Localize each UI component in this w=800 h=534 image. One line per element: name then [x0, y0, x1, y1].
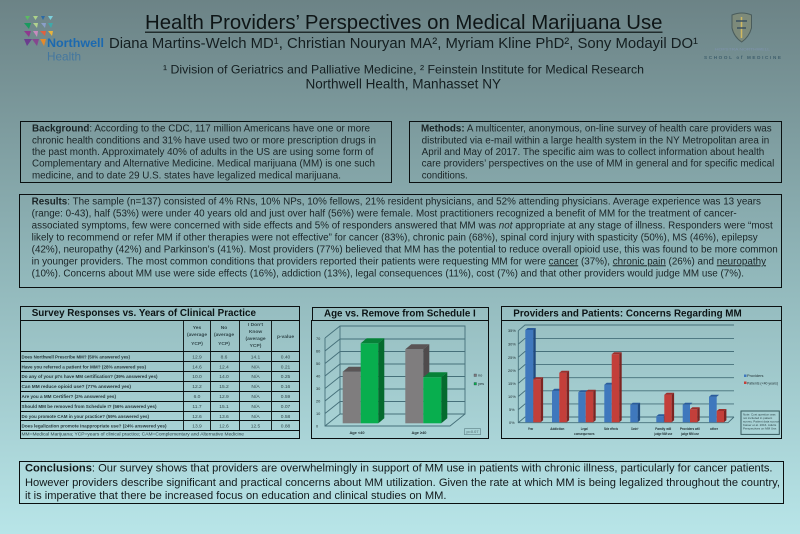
chart axis labels: 30%	[508, 342, 516, 346]
bars: legal consequences	[578, 390, 596, 422]
table rows: 0.21	[281, 364, 291, 370]
chart axis labels: 50	[316, 361, 321, 366]
table rows: 11.7	[192, 404, 202, 410]
table rows: Do any of your pt’s have MM certification? (39% answered yes)	[22, 374, 158, 380]
chart axis labels: 5%	[509, 407, 515, 412]
panel: conclusions: it is imperative that there be increased focus on education and clinical studies on MM.	[25, 490, 446, 502]
panel: background: Background: According to the CDC, 117 million Americans have one or more	[32, 124, 371, 135]
panel: results: (range: 0-43), half (53%) were under 40 years old and just over half (56%) were female. Most practitioners recognized a benefit of MM for the treatment of cancer-	[32, 209, 737, 220]
chart axis labels: 0%	[509, 420, 515, 425]
chart axis labels: 0	[316, 423, 319, 428]
logo: Northwell Health	[24, 16, 104, 64]
table column headers	[187, 322, 294, 349]
table rows: Should MM be removed from Schedule I? (56% answered yes)	[22, 404, 157, 410]
panel: results: likely to recommend or refer MM if other therapies were not effective” for cancer (83%), chronic pain (68%), spinal cord injury with spasticity (50%), MS (46%), epilepsy	[32, 233, 758, 244]
chart axis labels: Age ≥40	[412, 430, 426, 435]
bars: age 40 and over	[405, 344, 447, 423]
chart legend: yes	[478, 381, 484, 386]
chart axis labels	[316, 336, 426, 435]
p-value box: p=0.07	[466, 429, 479, 434]
panel: methods: care providers’ perspectives on the use of MM in general and for specific medical	[422, 159, 774, 170]
table rows: 12.6	[192, 414, 202, 420]
table rows: 13.6	[219, 414, 229, 420]
location: Northwell Health, Manhasset NY	[306, 77, 501, 92]
bars: side effects	[604, 352, 622, 422]
panel: conclusions: However providers describe significant and practical concerns about MM utilization. Given the rate at which MM is being legalized throughout the country,	[25, 477, 780, 489]
chart axis labels: Addiction	[550, 426, 565, 431]
panel: results: (10%). Concerns about MM use were side effects (16%), addiction (13%), legal consequences (11%), cost (7%) and that other providers would judge MM use (7%).	[32, 268, 744, 279]
chart axis labels: 20%	[508, 368, 516, 373]
chart axis labels: Providers will	[680, 426, 700, 431]
chart axis labels: 30	[316, 386, 321, 391]
chart axis labels: 60	[316, 348, 321, 353]
table rows: N/A	[251, 384, 260, 390]
table footnote: MM=Medical Marijuana; YCP=years of clinical practice; CAM=Complementary and Alternative Medicine	[22, 432, 244, 437]
table column headers: YCP)	[191, 341, 203, 347]
table column headers: YCP)	[218, 341, 230, 347]
panel: results: in younger providers. The most common conditions that providers reported their patients were requesting MM for were cancer (37%), chronic pain (26%) and neuropathy	[32, 256, 766, 267]
panel: background: Complementary and Alternative Medicine. Medical marijuana (MM) is one such	[32, 159, 375, 170]
chart axis labels: Family will	[655, 426, 671, 431]
chart note: Note: Cost question was	[743, 412, 776, 416]
table column headers: I Don’t	[248, 322, 263, 328]
panel: methods: conditions.	[422, 170, 468, 181]
panel: methods	[410, 122, 782, 182]
panel: background	[20, 122, 392, 182]
table rows: 0.88	[281, 424, 291, 430]
chart axis labels: Costs*	[631, 426, 639, 431]
table rows: 0.16	[281, 384, 291, 390]
chart heading: Providers and Patients: Concerns Regarding MM	[513, 308, 742, 320]
table rows: Does legalization promote inappropriate use? (24% answered yes)	[22, 424, 167, 430]
logo: Northwell Health: Northwell	[47, 37, 104, 50]
chart axis labels: Side effects	[604, 426, 618, 431]
table rows: N/A	[251, 394, 260, 400]
chart heading: Age vs. Remove from Schedule I	[324, 309, 476, 320]
chart note: survey. Patient data source:	[743, 420, 780, 424]
panel: methods: April and May of 2017. The specific aim was to collect information about health	[422, 147, 764, 158]
table rows: Have you referred a patient for MM? (28% answered yes)	[22, 364, 146, 370]
panel: methods: Methods: A multicenter, anonymous, on-line survey of health care providers was	[421, 124, 772, 135]
chart axis labels: 10	[316, 411, 321, 416]
panel: results: Results: The sample (n=137) consisted of 4% RNs, 10% NPs, 10% fellows, 21% resident physicians, and 52% attending physicians. Average experience was 13 years	[32, 197, 761, 208]
table rows: Are you a MM Certifier? (2% answered yes)	[22, 394, 116, 400]
table rows: 0.58	[281, 414, 291, 420]
panel: background: chronic health conditions and 31% have used two or more prescription drugs in	[32, 135, 376, 146]
authors: Diana Martins-Welch MD¹, Christian Nouryan MA², Myriam Kline PhD², Sony Modayil DO¹	[109, 35, 698, 52]
bars: fear	[525, 328, 543, 422]
table column headers: YCP)	[250, 343, 262, 349]
table rows: 14.1	[251, 354, 261, 360]
panel: background: the past month. Approximately 40% of adults in the US are using some form of	[32, 147, 374, 158]
table rows: 0.07	[281, 404, 291, 410]
chart note: Kaiser et al. 2016. Adults	[743, 423, 777, 427]
table heading: Survey Responses vs. Years of Clinical Practice	[32, 308, 256, 319]
table rows: 15.1	[219, 404, 229, 410]
bars: age under 40	[343, 338, 384, 423]
chart axis labels: other	[710, 426, 718, 431]
table rows: N/A	[251, 364, 260, 370]
chart axis labels: Legal	[581, 426, 588, 431]
table rows: 14.0	[219, 374, 229, 380]
panel: conclusions: Conclusions: Our survey shows that providers are overwhelmingly in support of MM use in patients with chronic illness, particularly for cancer patients.	[25, 463, 772, 475]
chart axis labels: consequences	[574, 431, 595, 436]
table column headers: p-value	[277, 334, 294, 340]
table column headers: No	[221, 325, 227, 331]
chart legend: Providers	[747, 373, 763, 378]
table rows: Can MM reduce opioid use? (77% answered yes)	[22, 384, 131, 390]
chart axis labels: judge MM use	[654, 431, 673, 436]
panel: results	[20, 194, 782, 288]
chart axis labels: 40	[316, 373, 321, 378]
table rows: Do you promote CAM in your practice? (59% answered yes)	[22, 414, 149, 420]
chart axis labels: Fear	[528, 426, 533, 431]
table rows: 12.4	[219, 364, 229, 370]
table rows: 0.25	[281, 374, 291, 380]
logo: School of Medicine shield: SCHOOL of MEDICINE	[704, 55, 781, 60]
table rows: 12.2	[192, 384, 202, 390]
chart axis labels: 20	[316, 398, 321, 403]
chart axis labels	[508, 328, 718, 436]
chart axis labels: 10%	[508, 394, 516, 399]
table rows: 10.0	[192, 374, 202, 380]
table column headers: (average	[187, 332, 207, 338]
affiliations: ¹ Division of Geriatrics and Palliative Medicine, ² Feinstein Institute for Medical Research	[163, 62, 644, 76]
table rows: N/A	[251, 404, 260, 410]
p-value box	[464, 429, 480, 435]
panel: results: associated symptoms, few were concerned with side effects and 5% of responders answered that MM was not appropriate at any stage of illness. Responders were “most	[32, 221, 773, 232]
table rows	[22, 354, 291, 430]
table rows: 0.59	[281, 394, 291, 400]
table rows: 6.0	[194, 394, 201, 400]
chart note: not included in patient	[743, 416, 772, 420]
chart grid	[325, 326, 465, 426]
table rows: 12.5	[251, 424, 261, 430]
title: Health Providers’ Perspectives on Medical Marijuana Use	[145, 11, 662, 34]
panel: methods: distributed via e-mail within a large health system in the NY Metropolitan area in	[422, 135, 769, 146]
table rows: 12.6	[219, 424, 229, 430]
chart note: Perspectives on MM Use.	[743, 426, 777, 430]
table rows: 8.6	[221, 354, 228, 360]
table rows: 13.9	[192, 424, 202, 430]
chart axis labels: 35%	[508, 328, 516, 333]
table column headers: (average	[214, 332, 234, 338]
table rows: 12.9	[192, 354, 202, 360]
chart grid	[518, 325, 734, 423]
table rows: Does Northwell Prescribe MM? (50% answered yes)	[22, 354, 130, 360]
bars: family judgement	[656, 393, 674, 422]
table rows: 15.2	[219, 384, 229, 390]
panel: age chart	[312, 308, 488, 438]
table rows: 0.40	[281, 354, 291, 360]
table rows: 12.9	[219, 394, 229, 400]
chart axis labels: 70	[316, 336, 321, 341]
bars: provider judgement	[683, 403, 700, 422]
chart axis labels: judge MM use	[680, 431, 700, 436]
chart legend	[474, 372, 484, 386]
table column headers: Know	[249, 329, 262, 335]
panel: conclusions	[20, 462, 784, 504]
chart axis labels: Age <40	[349, 430, 365, 435]
panel: background: medicine, and to date 29 U.S. states have legalized medical marijuana.	[32, 170, 341, 181]
panel: concerns chart	[502, 306, 782, 438]
bars: other	[709, 395, 726, 422]
chart axis labels: 25%	[508, 355, 516, 360]
logo: School of Medicine shield: HOFSTRA NORTHWELL	[715, 46, 771, 52]
chart axis labels: 15%	[508, 381, 516, 386]
chart note	[741, 411, 780, 434]
chart legend: Patients (<40 years)	[747, 380, 779, 386]
bars: costs	[630, 403, 640, 422]
table rows: 14.6	[192, 364, 202, 370]
table rows: N/A	[251, 374, 260, 380]
table column headers: Yes	[193, 325, 201, 331]
logo: Northwell Health: Health	[47, 51, 81, 64]
logo: School of Medicine shield	[704, 13, 781, 60]
chart legend: no	[478, 372, 482, 378]
table column headers: (average	[245, 336, 266, 342]
chart legend	[744, 373, 779, 386]
panel: results: (42%), neuropathy (42%) and Parkinson’s (41%). Most providers (77%) believed that MM has the potential to reduce overall opioid use, this was found to be more common	[32, 245, 778, 256]
panel: survey table	[20, 306, 300, 438]
bars: addiction	[552, 371, 569, 422]
table rows: N/A	[251, 414, 260, 420]
